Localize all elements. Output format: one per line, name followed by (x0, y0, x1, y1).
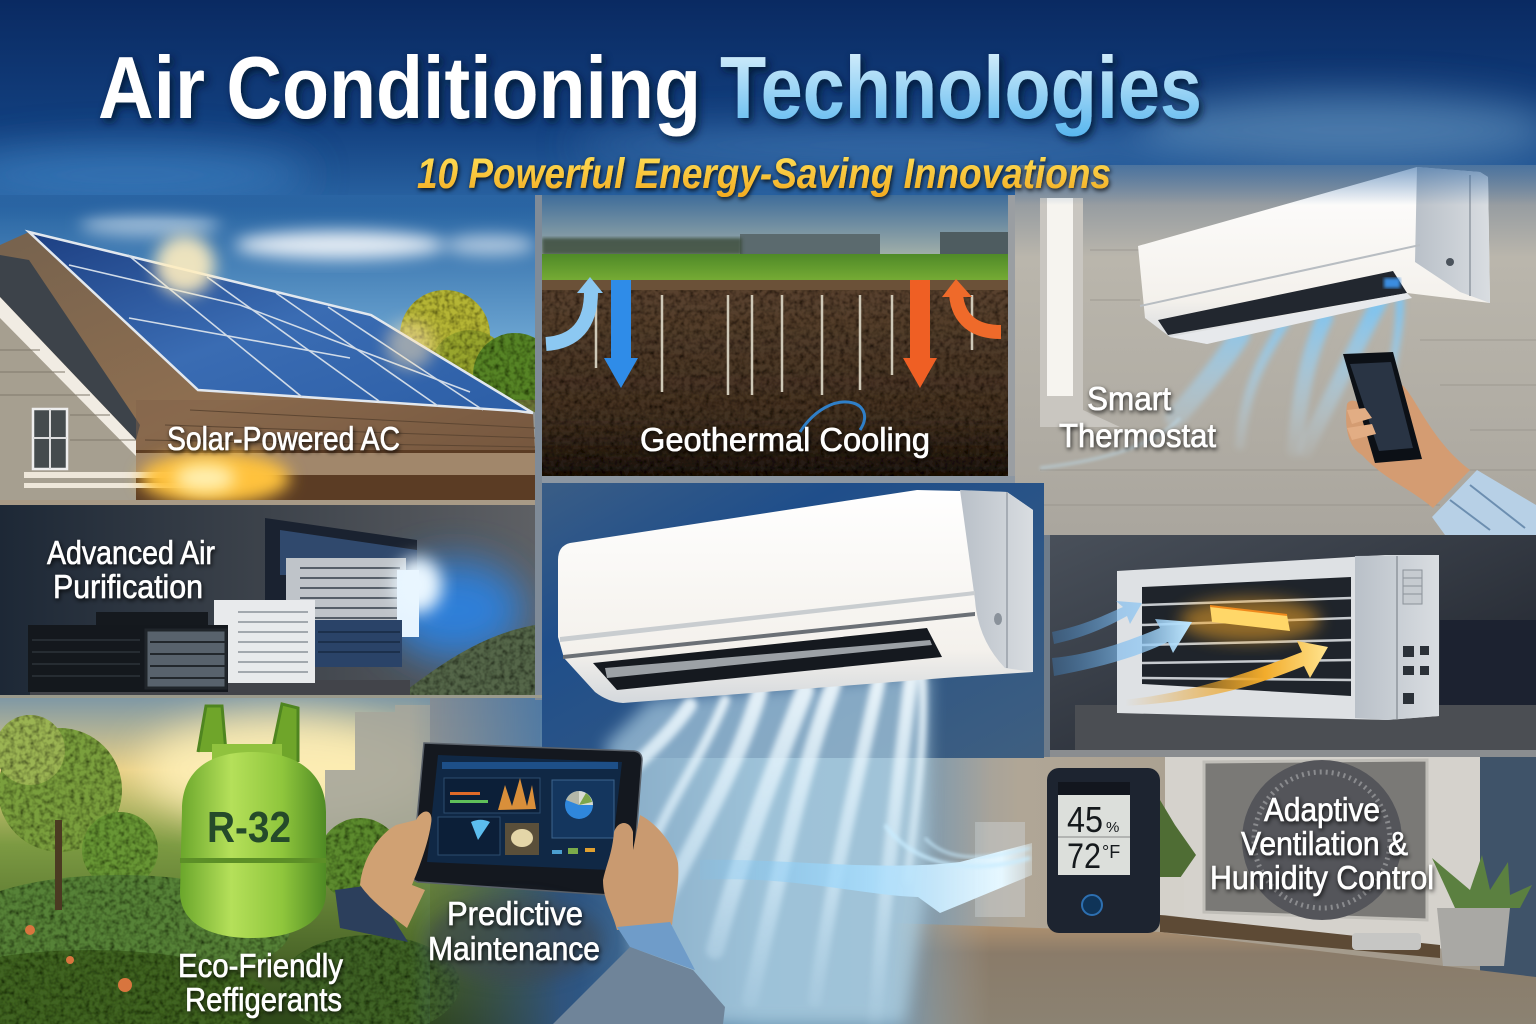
panel: advanced air purification (0, 505, 535, 695)
label: advanced air purification: Advanced Air (47, 534, 215, 571)
glow in vent (1180, 598, 1320, 642)
lower center backdrop (430, 757, 1030, 1024)
air stream (1175, 300, 1400, 450)
label: predictive maintenance (428, 895, 600, 967)
label: adaptive ventilation and humidity control (1210, 791, 1434, 896)
flowers (25, 925, 132, 992)
top fade over thermostat wall (1015, 165, 1536, 205)
label: adaptive ventilation and humidity control: Adaptive (1264, 791, 1380, 828)
phone and hand (1343, 352, 1536, 535)
pipes (596, 295, 972, 395)
label: advanced air purification (47, 534, 215, 605)
roof (0, 232, 535, 450)
right sleeve (553, 947, 725, 1024)
air stream (605, 665, 930, 1024)
label: smart thermostat (1059, 380, 1216, 454)
label: solar-powered AC: Solar-Powered AC (167, 420, 400, 457)
left sleeve (335, 885, 408, 942)
right hand and arm (603, 815, 678, 930)
label: predictive maintenance: Maintenance (428, 930, 600, 967)
backdrop under predictive label (427, 898, 603, 982)
fascia (0, 297, 136, 456)
label: smart thermostat: Thermostat (1059, 417, 1216, 454)
top fade over solar sky (0, 195, 535, 221)
humidity display device: 45 (1067, 799, 1103, 840)
panel: central AC unit (542, 483, 1044, 1024)
window (33, 409, 67, 469)
label: eco-friendly refrigerants (178, 947, 343, 1018)
window frame and vent (1160, 757, 1536, 982)
arrow: blue up-curved (546, 277, 603, 344)
arrow: blue down (604, 280, 638, 388)
right cuff (617, 922, 695, 970)
panel: solar-powered AC (0, 195, 557, 504)
humidity display device (1047, 768, 1160, 933)
tablet (412, 743, 642, 896)
shelf (890, 923, 1536, 1024)
label: adaptive ventilation and humidity control: Humidity Control (1210, 859, 1434, 896)
remote sensor (1352, 933, 1421, 950)
AC unit (1138, 167, 1490, 344)
label: adaptive ventilation and humidity control: Ventilation & (1241, 825, 1408, 862)
title (98, 38, 1202, 137)
trees (400, 290, 535, 413)
panel: geothermal cooling (542, 195, 1008, 476)
tablet and hands: predictive maintenance (335, 743, 725, 1024)
plant: wall shelf (1160, 800, 1196, 915)
panel gaps (0, 195, 1536, 757)
wall bricks (1040, 250, 1536, 505)
arrow: orange curved (942, 279, 1001, 332)
canister (975, 822, 1025, 917)
soil (542, 280, 1008, 476)
plant: potted (1432, 855, 1532, 966)
panel: eco-friendly refrigerants (0, 698, 560, 1024)
AC unit (558, 490, 1033, 703)
label: geothermal cooling: Geothermal Cooling (640, 421, 930, 458)
humidity display device: % (1106, 819, 1119, 836)
humidity display device: °F (1102, 842, 1120, 862)
refrigerant cylinder (180, 704, 326, 938)
roof eave shingles (136, 400, 536, 450)
purifier units (28, 557, 442, 692)
subtitle: 10 Powerful Energy-Saving Innovations (417, 150, 1111, 198)
humidity display device: 72 (1067, 837, 1101, 876)
refrigerant cylinder: R-32 (207, 803, 291, 852)
bush (400, 625, 535, 695)
air stream to device (700, 825, 1032, 913)
label: advanced air purification: Purification (53, 568, 203, 605)
arrow: orange down (903, 280, 937, 388)
title: Air Conditioning (98, 38, 701, 137)
title: Technologies (720, 38, 1202, 137)
panel: adaptive ventilation and humidity control (890, 757, 1536, 1024)
panel: vent unit with airflow (1050, 535, 1536, 750)
vent housing (1117, 555, 1439, 720)
trees and shrubs (0, 715, 460, 1024)
house wall (0, 315, 136, 500)
left hand (360, 811, 431, 928)
label: eco-friendly refrigerants: Eco-Friendly (178, 947, 343, 984)
wall strip (1040, 198, 1120, 427)
label: predictive maintenance: Predictive (447, 895, 583, 932)
label: smart thermostat: Smart (1087, 380, 1171, 417)
city skyline (325, 698, 534, 836)
arrows: airflow (1052, 601, 1328, 706)
label: eco-friendly refrigerants: Reffigerants (185, 981, 342, 1018)
solar panels (29, 232, 533, 413)
panel: smart thermostat (1015, 165, 1536, 535)
sky glow behind title (0, 95, 1536, 203)
clouds (80, 213, 535, 259)
